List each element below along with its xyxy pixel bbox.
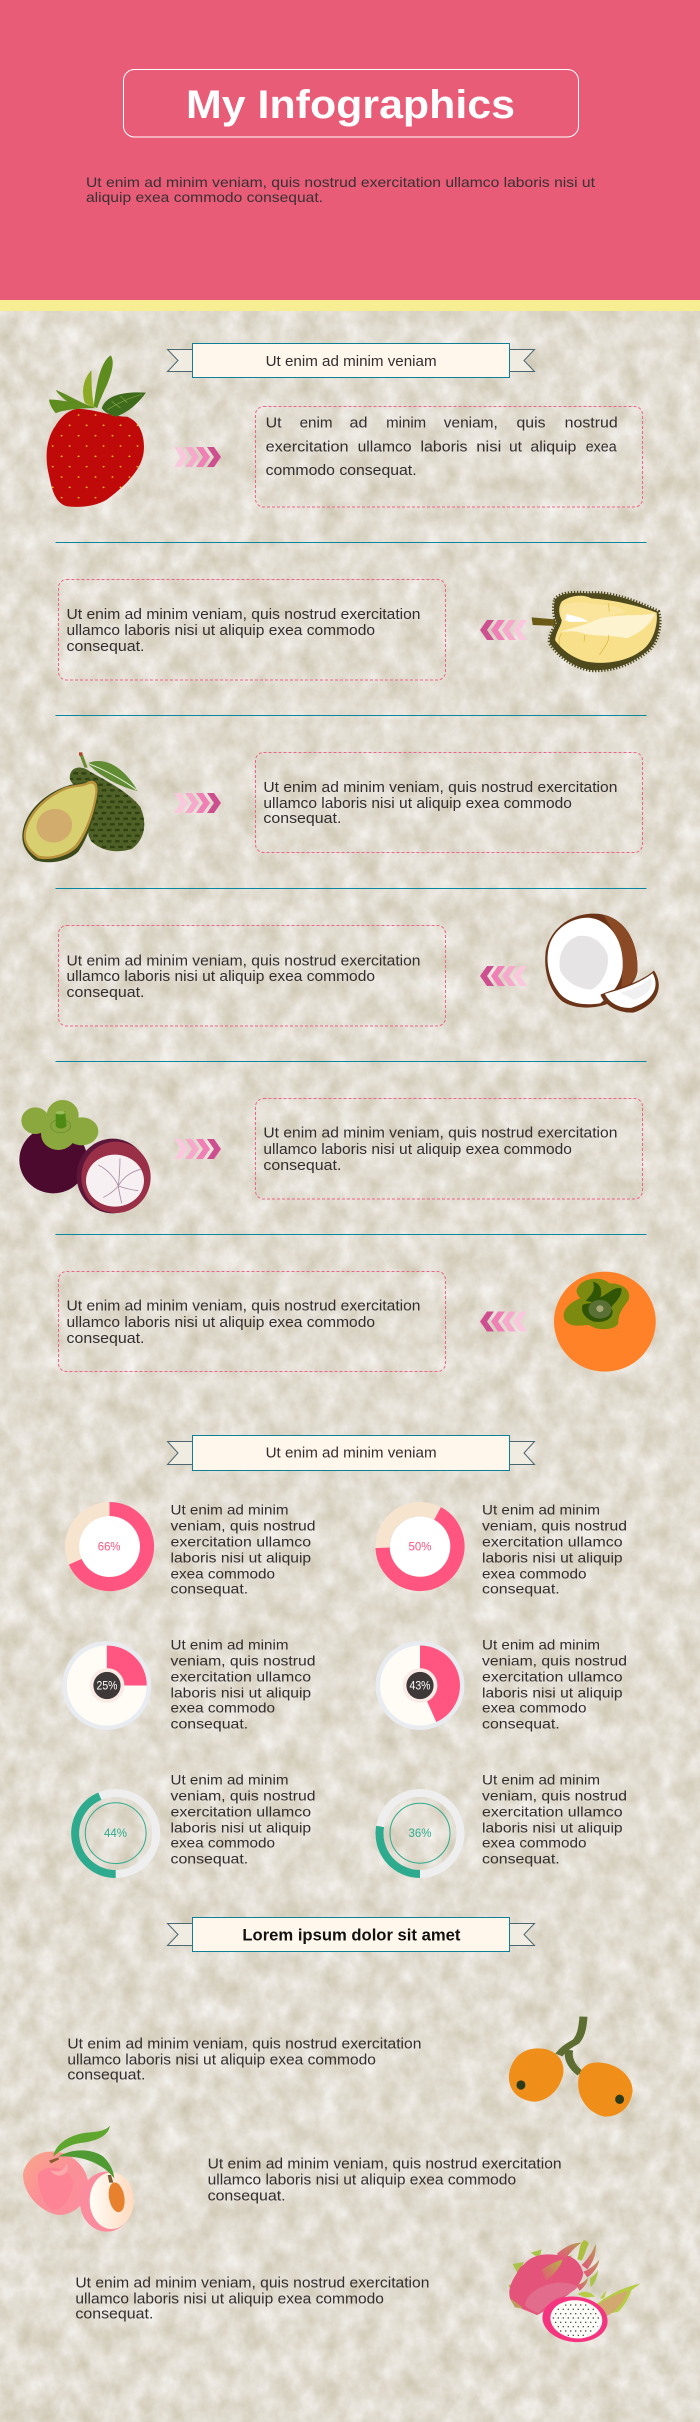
text block: dragon fruit: consequat. — [75, 2306, 153, 2322]
text: ring 44%: exea commodo — [170, 1835, 275, 1851]
text block: loquat: Ut enim ad minim veniam, quis nostrud exercitation — [67, 2036, 421, 2052]
text block: dragon fruit: Ut enim ad minim veniam, quis nostrud exercitation — [75, 2275, 429, 2291]
text block: peach — [208, 2156, 562, 2204]
icon: persimmon — [554, 1272, 656, 1372]
text: donut 50%: Ut enim ad minim — [482, 1501, 600, 1517]
arrow chevrons right 5 — [174, 1139, 221, 1159]
text box 1: Ut — [266, 415, 282, 431]
donut chart 50%: 50% — [408, 1540, 432, 1554]
arrow chevrons right 3 — [174, 793, 221, 813]
donut chart 66%: 66% — [98, 1540, 121, 1554]
ribbon heading 2: Ut enim ad minim veniam — [266, 1446, 437, 1462]
text: ring 36%: laboris nisi ut aliquip — [482, 1819, 623, 1835]
text: donut 50%: exea commodo — [482, 1565, 587, 1581]
text box 1: ullamco — [358, 439, 412, 455]
text: ring 36%: exercitation ullamco — [482, 1803, 623, 1819]
arrow chevrons left 2 — [480, 620, 527, 640]
text box 5: Ut enim ad minim veniam, quis nostrud exercitation — [263, 1126, 617, 1142]
text box 4: ullamco laboris nisi ut aliquip exea commodo — [66, 969, 375, 985]
arrow chevrons left 4 — [480, 966, 527, 986]
text: donut 50% — [482, 1501, 627, 1596]
arrow chevrons right 1 — [174, 447, 221, 467]
text box 1: ad — [350, 415, 368, 431]
text block: peach: ullamco laboris nisi ut aliquip exea commodo — [208, 2172, 516, 2188]
ribbon heading 1: Ut enim ad minim veniam — [266, 354, 437, 370]
text: pie 25%: laboris nisi ut aliquip — [170, 1684, 311, 1700]
icon: peach — [23, 2126, 134, 2232]
icon: durian — [532, 593, 660, 670]
text box 6: ullamco laboris nisi ut aliquip exea commodo — [66, 1315, 375, 1331]
text box 6: consequat. — [66, 1331, 144, 1347]
text box 3: ullamco laboris nisi ut aliquip exea commodo — [263, 796, 572, 812]
text box 1 — [256, 406, 642, 507]
text box 6 — [58, 1272, 446, 1372]
ring chart 36%: 36% — [408, 1826, 432, 1840]
text box 1: quis — [516, 415, 546, 431]
text: ring 36%: Ut enim ad minim — [482, 1771, 600, 1787]
text: pie 43%: exea commodo — [482, 1700, 587, 1716]
text box 1: ut — [509, 439, 522, 455]
title box: My Infographics — [186, 83, 515, 127]
text: pie 25%: consequat. — [170, 1715, 248, 1731]
text: donut 50%: veniam, quis nostrud — [482, 1517, 627, 1533]
text box 1: enim — [300, 415, 333, 431]
donut chart 50% — [383, 1509, 457, 1584]
text box 4 — [58, 926, 446, 1026]
text box 1: minim — [386, 415, 426, 431]
ribbon heading 3: Lorem ipsum dolor sit amet — [242, 1926, 461, 1945]
icon: coconut — [545, 914, 659, 1013]
text: ring 36%: exea commodo — [482, 1835, 587, 1851]
icon: loquat — [509, 2017, 633, 2117]
ring chart 44% — [75, 1793, 156, 1874]
text block: loquat — [67, 2036, 421, 2083]
text box 4: consequat. — [66, 985, 144, 1001]
text: pie 43%: Ut enim ad minim — [482, 1636, 600, 1652]
text: ring 44%: consequat. — [170, 1850, 248, 1866]
text box 1: nostrud — [565, 415, 618, 431]
text: donut 50%: exercitation ullamco — [482, 1533, 623, 1549]
text box 2: consequat. — [66, 639, 144, 655]
text box 5: consequat. — [263, 1158, 341, 1174]
text: pie 25%: Ut enim ad minim — [170, 1636, 288, 1652]
text block: loquat: consequat. — [67, 2067, 145, 2083]
text: donut 50%: consequat. — [482, 1580, 560, 1596]
text: donut 66%: Ut enim ad minim — [170, 1501, 288, 1517]
arrow chevrons left 6 — [480, 1312, 527, 1332]
text box 1: exercitation — [266, 439, 349, 455]
text: donut 50%: laboris nisi ut aliquip — [482, 1549, 623, 1565]
text: pie 43% — [482, 1636, 627, 1731]
donut chart 66% — [72, 1509, 147, 1584]
text: donut 66%: veniam, quis nostrud — [170, 1517, 316, 1533]
text: ring 36%: consequat. — [482, 1850, 560, 1866]
header intro text: Ut enim ad minim veniam, quis nostrud exercitation ullamco laboris nisi ut — [86, 174, 595, 190]
text: ring 36% — [482, 1771, 627, 1866]
pie chart 25% — [62, 1641, 151, 1730]
text: pie 43%: consequat. — [482, 1715, 560, 1731]
ring chart 36% — [380, 1793, 460, 1874]
text: pie 25% — [170, 1636, 316, 1731]
text block: dragon fruit: ullamco laboris nisi ut aliquip exea commodo — [75, 2291, 384, 2307]
text box 5 — [256, 1098, 642, 1199]
ribbon heading 2 — [168, 1436, 534, 1470]
text box 6: Ut enim ad minim veniam, quis nostrud exercitation — [66, 1299, 420, 1315]
text box 2: ullamco laboris nisi ut aliquip exea commodo — [66, 623, 375, 639]
text box 3: consequat. — [263, 811, 341, 827]
header banner — [0, 0, 700, 311]
text: ring 44%: veniam, quis nostrud — [170, 1787, 316, 1803]
icon: strawberry — [45, 355, 147, 507]
text: pie 43%: exercitation ullamco — [482, 1668, 623, 1684]
pie chart 43%: 43% — [410, 1680, 430, 1692]
text box 5: ullamco laboris nisi ut aliquip exea commodo — [263, 1142, 572, 1158]
text block: dragon fruit — [75, 2275, 429, 2322]
text: pie 25%: exercitation ullamco — [170, 1668, 311, 1684]
text: donut 66%: exea commodo — [170, 1565, 275, 1581]
text box 1: commodo consequat. — [266, 463, 417, 479]
text: ring 44%: exercitation ullamco — [170, 1803, 311, 1819]
text box 1: nisi — [476, 439, 501, 455]
text: donut 66% — [170, 1501, 316, 1596]
icon: mangosteen — [19, 1100, 151, 1213]
text box 1: exea — [586, 439, 618, 455]
text: donut 66%: laboris nisi ut aliquip — [170, 1549, 311, 1565]
text block: peach: consequat. — [208, 2188, 286, 2204]
icon: avocado — [22, 752, 148, 862]
text block: loquat: ullamco laboris nisi ut aliquip exea commodo — [67, 2052, 376, 2068]
text: donut 66%: exercitation ullamco — [170, 1533, 311, 1549]
ribbon heading 3 — [168, 1918, 534, 1952]
text block: peach: Ut enim ad minim veniam, quis nostrud exercitation — [208, 2156, 562, 2172]
header intro text — [86, 174, 595, 205]
text box 2 — [58, 580, 446, 680]
ring chart 44%: 44% — [104, 1826, 127, 1840]
text: ring 36%: veniam, quis nostrud — [482, 1787, 627, 1803]
text: pie 43%: laboris nisi ut aliquip — [482, 1684, 623, 1700]
text: pie 25%: veniam, quis nostrud — [170, 1652, 316, 1668]
icon: dragon fruit — [508, 2240, 641, 2345]
title box — [124, 70, 578, 137]
text box 1: veniam, — [444, 415, 498, 431]
header intro text: aliquip exea commodo consequat. — [86, 189, 323, 205]
text: ring 44%: laboris nisi ut aliquip — [170, 1819, 311, 1835]
pie chart 25%: 25% — [96, 1680, 118, 1692]
text: ring 44%: Ut enim ad minim — [170, 1771, 288, 1787]
text box 2: Ut enim ad minim veniam, quis nostrud exercitation — [66, 607, 420, 623]
text: pie 43%: veniam, quis nostrud — [482, 1652, 627, 1668]
text box 3 — [256, 752, 642, 852]
text: donut 66%: consequat. — [170, 1580, 248, 1596]
pie chart 43% — [376, 1641, 464, 1730]
text box 1: laboris — [420, 439, 468, 455]
text: pie 25%: exea commodo — [170, 1700, 275, 1716]
ribbon heading 1 — [168, 344, 534, 378]
text box 1: aliquip — [530, 439, 576, 455]
text box 3: Ut enim ad minim veniam, quis nostrud exercitation — [263, 780, 617, 796]
text box 4: Ut enim ad minim veniam, quis nostrud exercitation — [66, 953, 420, 969]
text: ring 44% — [170, 1771, 316, 1866]
